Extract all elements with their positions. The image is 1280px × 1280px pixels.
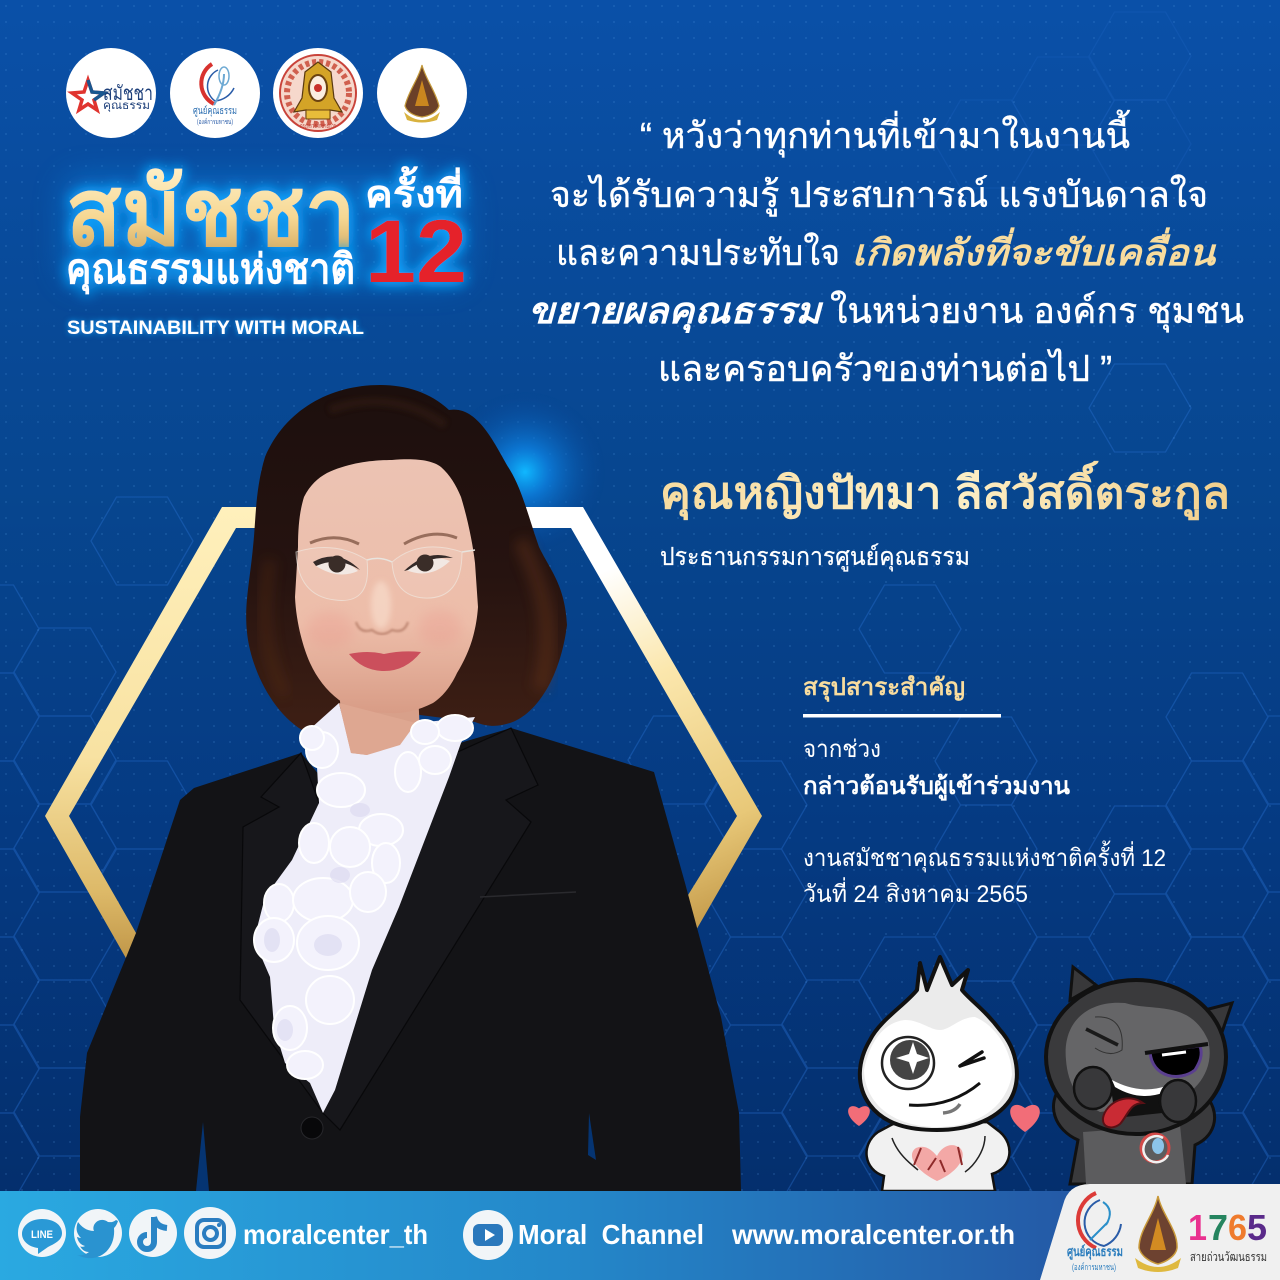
wink and smile — [960, 1052, 984, 1066]
ears — [1070, 967, 1232, 1038]
website: www.moralcenter.or.th — [731, 1219, 1015, 1250]
1765: 1 — [1188, 1207, 1207, 1248]
1765 — [1188, 1207, 1267, 1264]
logo: สมัชชาคุณธรรม: สมัชชา — [103, 83, 153, 105]
1765: 7 — [1208, 1207, 1228, 1248]
1765: 5 — [1247, 1207, 1267, 1248]
1765: 6 — [1228, 1207, 1247, 1248]
icon: Instagram — [184, 1207, 236, 1259]
pocket and button — [480, 892, 576, 897]
summary details: กล่าวต้อนรับผู้เข้าร่วมงาน — [803, 773, 1071, 801]
title glow — [62, 175, 467, 285]
summary block — [803, 674, 1166, 908]
icon: TikTok — [129, 1209, 177, 1257]
head — [1046, 980, 1226, 1134]
portrait — [80, 385, 741, 1191]
summary details: วันที่ 24 สิงหาคม 2565 — [803, 877, 1028, 908]
icon: LINE — [18, 1209, 66, 1257]
quote: ในหน่วยงาน องค์กร ชุมชน — [830, 290, 1244, 333]
crescent logo: ศูนย์คุณธรรม — [1067, 1244, 1123, 1260]
speaker name: คุณหญิงปัทมา ลีสวัสดิ์ตระกูล — [660, 460, 1230, 521]
title: คุณธรรมแห่งชาติ: คุณธรรมแห่งชาติ — [66, 246, 355, 295]
hearts — [848, 1106, 870, 1126]
logo: ministry emblem: กระทรวงศึกษาธิการ — [300, 121, 336, 130]
summary heading: สรุปสาระสำคัญ — [803, 674, 965, 703]
blouse — [254, 703, 475, 1113]
gold hexagon frame — [45, 507, 762, 960]
arm gaps — [196, 1113, 596, 1191]
face — [295, 459, 478, 713]
crescent logo: (องค์การมหาชน) — [1072, 1261, 1116, 1272]
hands — [1074, 1067, 1112, 1109]
footer bar — [0, 1184, 1280, 1280]
title: ครั้งที่: ครั้งที่ — [365, 166, 463, 216]
quote: และความประทับใจ — [556, 232, 840, 273]
speaker title: ประธานกรรมการศูนย์คุณธรรม — [660, 543, 970, 572]
event title — [62, 160, 467, 339]
quote: และครอบครัวของท่านต่อไป ” — [658, 348, 1112, 389]
quote — [528, 109, 1244, 389]
logo: ศูนย์คุณธรรม: (องค์การมหาชน) — [197, 118, 233, 126]
handle: moralcenter_th — [243, 1219, 428, 1250]
summary details: งานสมัชชาคุณธรรมแห่งชาติครั้งที่ 12 — [803, 840, 1166, 873]
logo: สมัชชาคุณธรรม — [66, 48, 156, 138]
neck — [338, 680, 420, 758]
title: สมัชชา: สมัชชา — [66, 160, 356, 265]
icon: YouTube — [463, 1210, 513, 1260]
jacket — [80, 728, 741, 1191]
logo: ศูนย์คุณธรรม — [170, 48, 260, 138]
hair — [246, 385, 567, 730]
head — [860, 957, 1017, 1130]
logo: สมัชชาคุณธรรม: คุณธรรม — [103, 100, 150, 112]
chest logo — [1141, 1134, 1169, 1162]
culture emblem — [1135, 1196, 1181, 1272]
summary details — [803, 736, 1166, 908]
quote: เกิดพลังที่จะขับเคลื่อน — [852, 227, 1216, 273]
quote: จะได้รับความรู้ ประสบการณ์ แรงบันดาลใจ — [550, 174, 1208, 217]
icon: Twitter — [74, 1209, 122, 1258]
logo: ministry of culture emblem — [377, 48, 467, 138]
star eye — [882, 1037, 934, 1089]
quote: ขยายผลคุณธรรม — [528, 290, 823, 333]
channel name: Moral Channel — [518, 1219, 704, 1250]
title: 12: 12 — [365, 201, 467, 301]
lapels — [240, 728, 538, 1130]
mascot: dark character — [1046, 967, 1232, 1184]
logo: ministry emblem — [273, 48, 363, 138]
white logo panel — [1040, 1184, 1280, 1280]
heart hands — [912, 1145, 963, 1181]
crescent logo — [1067, 1193, 1123, 1272]
eye — [1150, 1046, 1201, 1076]
summary details: จากช่วง — [803, 736, 881, 763]
body — [1053, 1085, 1215, 1184]
mouth and tongue — [1110, 1080, 1175, 1118]
quote: “ หวังว่าทุกท่านที่เข้ามาในงานนี้ — [640, 109, 1131, 158]
mascot: white character — [848, 957, 1040, 1191]
wink — [1086, 1029, 1118, 1045]
tagline: SUSTAINABILITY WITH MORAL — [67, 318, 364, 339]
logo row — [66, 48, 467, 138]
logo: ศูนย์คุณธรรม: ศูนย์คุณธรรม — [193, 105, 237, 117]
facial features — [296, 534, 475, 671]
body — [867, 1122, 1009, 1191]
icon: LINE: LINE — [31, 1229, 53, 1241]
